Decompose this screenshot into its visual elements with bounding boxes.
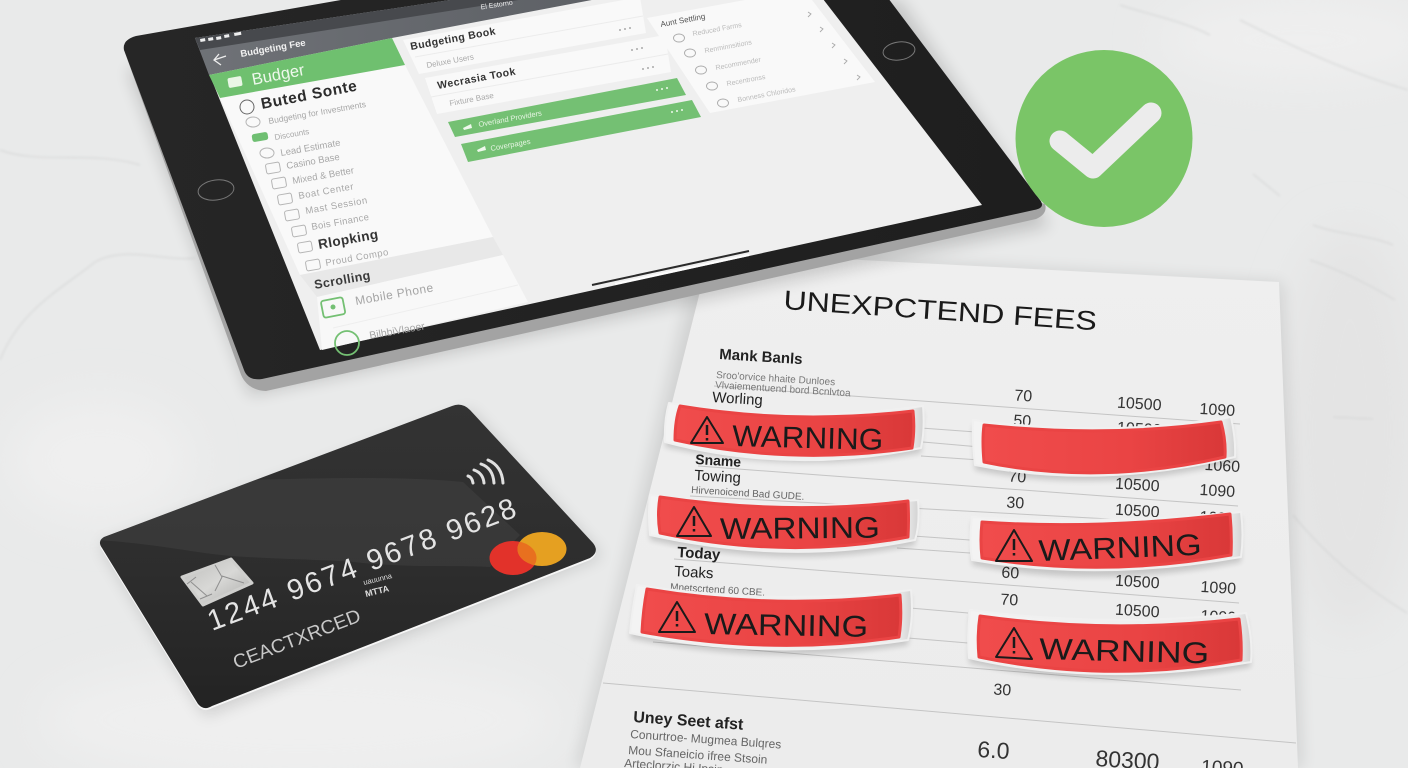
icon: warning triangle [677, 507, 711, 536]
tablet shadow [128, 0, 1050, 395]
warning sticker 3 [649, 495, 919, 557]
cardholder text: CEACTXRCED [230, 606, 364, 674]
header label: Budger [250, 61, 306, 89]
scrolling heading: Scrolling [313, 268, 372, 292]
sticker label: WARNING [720, 512, 880, 546]
budgeting column: Coverpages [490, 137, 531, 153]
fee amounts: 1090 [1200, 608, 1237, 627]
fee labels: Today [677, 544, 721, 564]
screen [195, 0, 982, 350]
dark status strip [195, 0, 525, 50]
fee labels: Sname [695, 451, 742, 470]
fee amounts: 1090 [1200, 579, 1237, 598]
icon: warning triangle [996, 628, 1032, 659]
settings column: Recommender [715, 57, 762, 72]
fee amounts: 10500 [1115, 602, 1160, 621]
fee amounts: 60 [1001, 564, 1020, 583]
card body [100, 405, 596, 708]
fee amounts: 10500 [1117, 420, 1162, 439]
fee amounts: 1090 [1199, 427, 1236, 446]
left tablet button [197, 178, 235, 202]
sidebar panel: BilhbiVlaoer [368, 320, 426, 342]
settings column: Renminnsitions [704, 39, 753, 55]
small card text [362, 571, 394, 599]
fee amounts: 1090 [1199, 482, 1236, 501]
section title: Buted Sonte [260, 78, 359, 113]
icon: green check badge [1016, 50, 1192, 227]
bold row: Rlopking [317, 227, 380, 252]
tablet silver edge [124, 45, 1046, 391]
fee amounts: 10500 [1115, 476, 1160, 495]
settings column: Recentronss [726, 74, 766, 88]
sticker label: WARNING [1038, 529, 1202, 568]
sidebar rows [268, 99, 390, 269]
blank red sticker [973, 417, 1235, 481]
fee amounts: 30 [993, 681, 1012, 700]
budgeting column: Wecrasia Took [436, 66, 517, 92]
home indicator [592, 251, 749, 285]
fee labels: Hirvenoicend Bad GUDE. [691, 485, 805, 503]
fee labels [624, 346, 851, 768]
chip [182, 559, 252, 605]
credit card [98, 405, 602, 716]
tablet bezel [124, 0, 1042, 379]
fee amounts: 1090 [1199, 401, 1236, 420]
card shadow [100, 410, 602, 716]
sticker label: WARNING [704, 608, 868, 644]
fee statement paper [576, 250, 1302, 768]
fee amounts [977, 387, 1244, 768]
fee labels: Mnetscrtend 60 CBE. [670, 582, 765, 599]
warning sticker 1 [665, 403, 924, 463]
tablet [124, 0, 1050, 395]
sidebar rows: Budgeting for Investments [268, 99, 367, 126]
fee labels: Vlvaiementuend bord Bcnlvtoa [715, 380, 851, 399]
fee amounts: 1090 [1199, 509, 1236, 528]
card number: 1244 9674 9678 9628 [203, 493, 521, 638]
row dots [619, 27, 654, 70]
fee amounts: 10500 [1115, 573, 1160, 592]
wallet row [335, 331, 359, 355]
fee amounts: 1060 [1204, 457, 1241, 476]
header icon [227, 76, 243, 88]
fee amounts: 50 [1013, 412, 1032, 431]
budgeting column: Fixture Base [449, 91, 495, 108]
warning sticker 5 [630, 585, 912, 654]
sidebar rows: Proud Compo [325, 247, 390, 269]
row icons [246, 117, 321, 271]
section icon [240, 100, 254, 114]
budgeting column: Overland Providers [478, 108, 543, 129]
fee amounts: 70 [1008, 468, 1027, 487]
budgeting column: Deluxe Users [426, 52, 475, 70]
status icons [200, 32, 241, 42]
warning sticker 6 [968, 610, 1251, 679]
sidebar rows: Bois Finance [311, 212, 370, 233]
statement title: UNEXPCTEND FEES [783, 285, 1098, 336]
mastercard logo [490, 532, 566, 575]
sidebar rows: Lead Estimate [280, 138, 341, 159]
fee labels: Toaks [674, 563, 714, 582]
contactless icon [468, 460, 503, 483]
green pill icon [251, 132, 269, 142]
mobile phone row [321, 297, 346, 318]
fee amounts: 10500 [1115, 502, 1160, 521]
settings column: Aunt Settling [660, 12, 706, 29]
card headings: Budgeting Book [409, 25, 497, 53]
sidebar rows: Discounts [274, 127, 310, 142]
sticker label: WARNING [732, 420, 884, 457]
sidebar rows: Mixed & Better [292, 165, 355, 187]
back arrow [214, 54, 226, 65]
fee labels: Worling [712, 389, 763, 409]
sticker label: WARNING [1039, 633, 1210, 670]
warning sticker 4 [970, 512, 1242, 577]
status and nav band [195, 0, 597, 75]
sidebar rows: Casino Base [286, 152, 341, 172]
fee labels: Sroo'orvice hhaite Dunloes [716, 370, 835, 388]
table rules [603, 386, 1296, 743]
fee amounts: 6.0 [977, 736, 1010, 764]
sidebar panel: Mobile Phone [354, 280, 435, 308]
fee labels: Conurtroe- Mugmea Bulqres [630, 727, 782, 752]
small card text: MTTA [364, 583, 391, 599]
fee labels: Mank Banls [719, 346, 803, 368]
icon: warning triangle [659, 602, 695, 632]
settings column: Bonness Chloridos [737, 86, 797, 104]
fee amounts: 30 [1006, 494, 1025, 513]
fee labels: Mou Sfaneicio ifree Stsoin [628, 743, 768, 767]
card edge [100, 407, 596, 710]
sidebar panel [209, 38, 528, 355]
sidebar rows: Boat Center [298, 181, 355, 202]
fee amounts: 70 [1014, 387, 1033, 406]
budgeting column [403, 0, 701, 162]
small card text: uauunna [362, 571, 394, 587]
fee amounts: 10500 [1117, 395, 1162, 414]
green header [209, 38, 405, 98]
settings column [647, 0, 875, 113]
green action rows [448, 78, 686, 137]
sidebar rows: Mast Session [305, 195, 369, 217]
icon: warning triangle [691, 417, 723, 443]
card wave [98, 478, 520, 567]
fee labels: Uney Seet afst [633, 709, 745, 734]
icon: warning triangle [996, 530, 1032, 561]
fee amounts: 70 [1000, 591, 1019, 610]
settings column: Reduced Farms [692, 22, 743, 38]
right tablet button [882, 40, 916, 62]
fee labels: Towing [694, 467, 741, 487]
app title: Budgeting Fee [240, 38, 307, 60]
